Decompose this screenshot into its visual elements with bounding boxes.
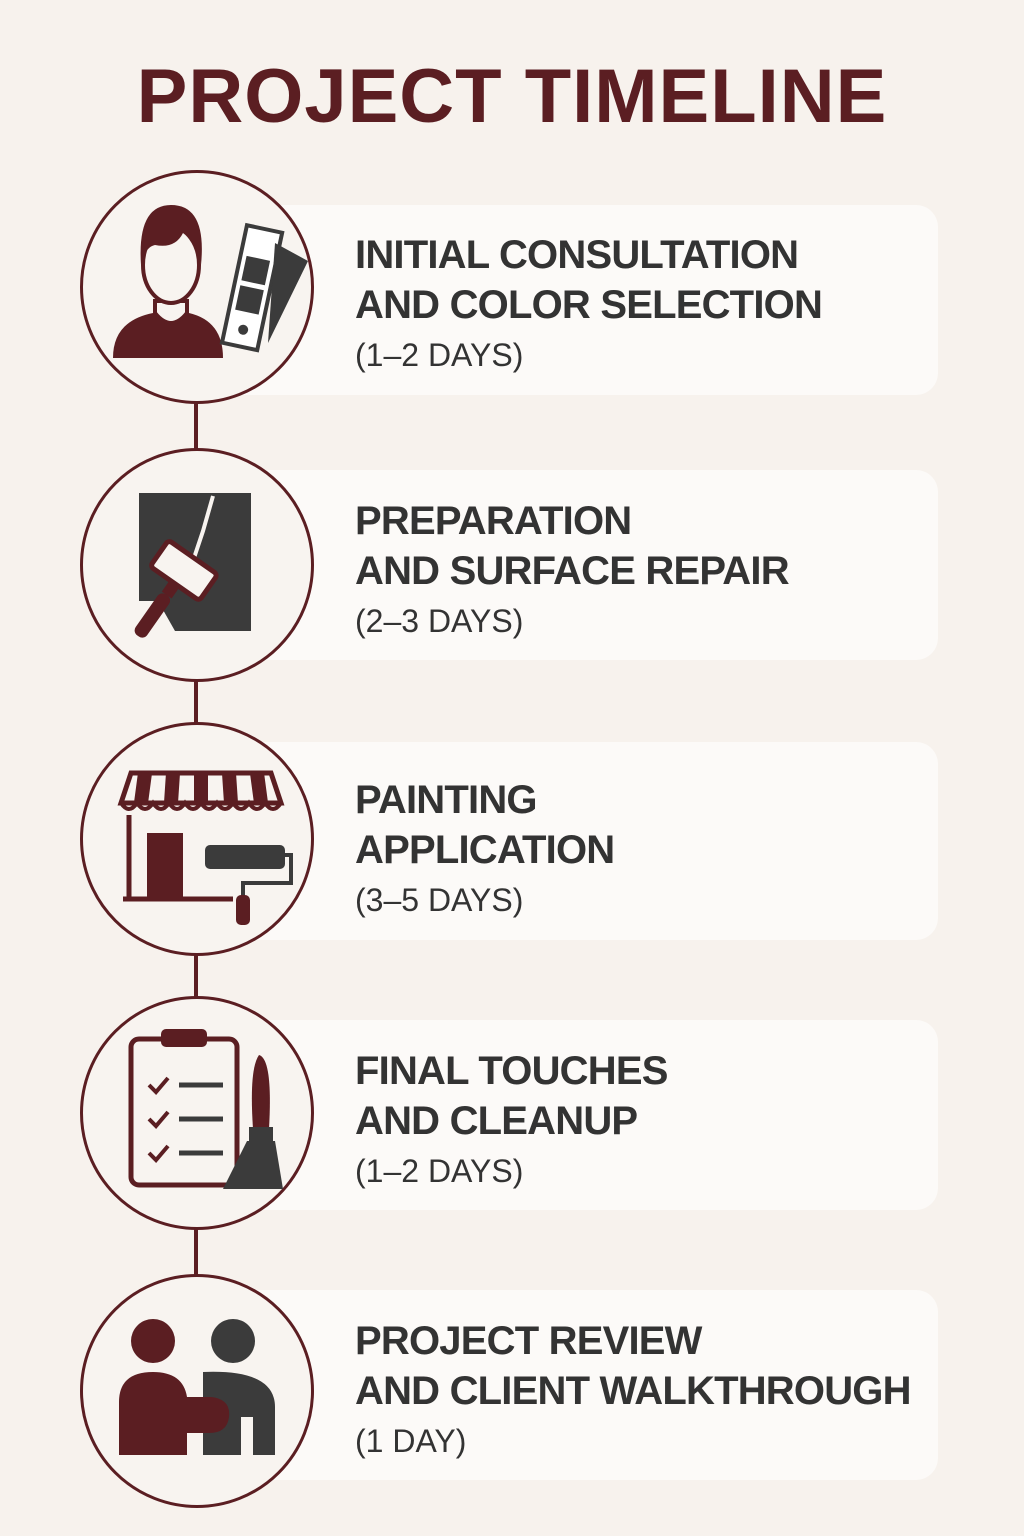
step 3 icon circle xyxy=(80,722,314,956)
step 3 text xyxy=(355,778,614,918)
step 3 text: (3–5 DAYS) xyxy=(355,882,523,918)
card 3 xyxy=(200,742,938,940)
step 2 icon circle xyxy=(80,448,314,682)
step 3 text: APPLICATION xyxy=(355,828,614,872)
step 2 text: AND SURFACE REPAIR xyxy=(355,549,789,593)
card 4 xyxy=(200,1020,938,1210)
step 2 text xyxy=(355,499,789,639)
card 5 xyxy=(200,1290,938,1480)
title: PROJECT TIMELINE xyxy=(137,54,887,139)
step 4 icon circle xyxy=(80,996,314,1230)
step 5 text: PROJECT REVIEW xyxy=(355,1319,702,1363)
step 1 text: AND COLOR SELECTION xyxy=(355,283,822,327)
step 1 text xyxy=(355,233,822,373)
card 2 xyxy=(200,470,938,660)
step 4 text: FINAL TOUCHES xyxy=(355,1049,668,1093)
step 5 text: (1 DAY) xyxy=(355,1423,466,1459)
step 2 text: (2–3 DAYS) xyxy=(355,603,523,639)
step 3 text: PAINTING xyxy=(355,778,537,822)
step 1 text: INITIAL CONSULTATION xyxy=(355,233,798,277)
step 5 text: AND CLIENT WALKTHROUGH xyxy=(355,1369,911,1413)
card 1 xyxy=(200,205,938,395)
step 1 icon circle xyxy=(80,170,314,404)
step 5 icon circle xyxy=(80,1274,314,1508)
step 2 text: PREPARATION xyxy=(355,499,631,543)
step 1 text: (1–2 DAYS) xyxy=(355,337,523,373)
step 5 text xyxy=(355,1319,911,1459)
step 4 text xyxy=(355,1049,668,1189)
step 4 text: (1–2 DAYS) xyxy=(355,1153,523,1189)
step 4 text: AND CLEANUP xyxy=(355,1099,637,1143)
